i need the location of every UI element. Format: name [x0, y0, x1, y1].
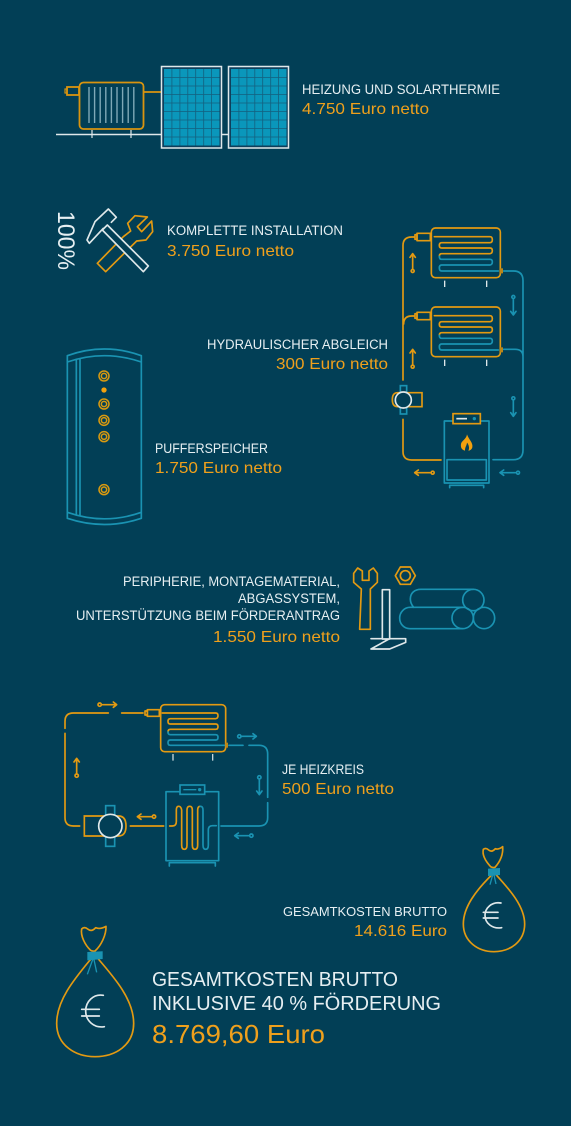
pipes: [65, 713, 200, 849]
text: gesamtkosten inklusive förderung: [152, 969, 441, 1049]
text: hydraulischer abgleich: 300 Euro netto: [276, 356, 388, 373]
text: komplette installation: 3.750 Euro netto: [167, 243, 294, 260]
icon: hammer and wrench: [87, 209, 153, 272]
text: peripherie: PERIPHERIE, MONTAGEMATERIAL,: [123, 574, 340, 589]
icon: tools and pipes: [354, 567, 495, 649]
icon: buffer tank: [67, 349, 141, 524]
text: gesamtkosten inklusive förderung: GESAMTKOSTEN BRUTTO: [152, 969, 398, 991]
radiator bottom: [415, 307, 503, 366]
icon: radiator and solar panels: [56, 66, 288, 148]
radiator top: [415, 228, 503, 287]
icon: money bag small: [463, 847, 525, 952]
text: komplette installation: KOMPLETTE INSTALLATION: [167, 223, 343, 238]
text: gesamtkosten inklusive förderung: 8.769,60 Euro: [152, 1019, 325, 1049]
text: gesamtkosten brutto: 14.616 Euro: [354, 923, 447, 940]
text: heizung und solarthermie: HEIZUNG UND SOLARTHERMIE: [302, 82, 500, 97]
text: peripherie: ABGASSYSTEM,: [238, 591, 340, 606]
text: heizung und solarthermie: 4.750 Euro netto: [302, 101, 429, 118]
text: heizung und solarthermie: [302, 82, 500, 118]
text: gesamtkosten brutto: GESAMTKOSTEN BRUTTO: [283, 904, 447, 919]
text: gesamtkosten inklusive förderung: INKLUSIVE 40 % FÖRDERUNG: [152, 993, 441, 1015]
boiler: [166, 785, 219, 866]
text: komplette installation: [167, 223, 343, 260]
text: pufferspeicher: 1.750 Euro netto: [155, 460, 282, 477]
flow arrows: [74, 702, 262, 838]
flow arrows: [410, 254, 519, 475]
text: peripherie: UNTERSTÜTZUNG BEIM FÖRDERANTRAG: [76, 608, 340, 623]
icon: money bag large: [57, 926, 134, 1057]
diagram: heating circuit with two radiators and boiler: [392, 228, 523, 488]
text: je heizkreis: JE HEIZKREIS: [282, 762, 364, 777]
pipes: [403, 237, 441, 460]
text: je heizkreis: 500 Euro netto: [282, 781, 394, 798]
diagram: heating circuit with mixer: [65, 702, 268, 866]
text: pufferspeicher: PUFFERSPEICHER: [155, 441, 268, 456]
text: peripherie: 1.550 Euro netto: [213, 629, 340, 646]
text: gesamtkosten brutto: [283, 904, 447, 940]
pump: [84, 806, 126, 846]
text: je heizkreis: [282, 762, 394, 798]
radiator: [145, 705, 228, 761]
text: hydraulischer abgleich: [207, 337, 388, 373]
text: hydraulischer abgleich: HYDRAULISCHER ABGLEICH: [207, 337, 388, 352]
text: peripherie: [76, 574, 340, 646]
pump: [392, 386, 422, 414]
boiler: [444, 414, 489, 488]
text: pufferspeicher: [155, 441, 282, 477]
label: 100%: 100%: [52, 211, 79, 270]
